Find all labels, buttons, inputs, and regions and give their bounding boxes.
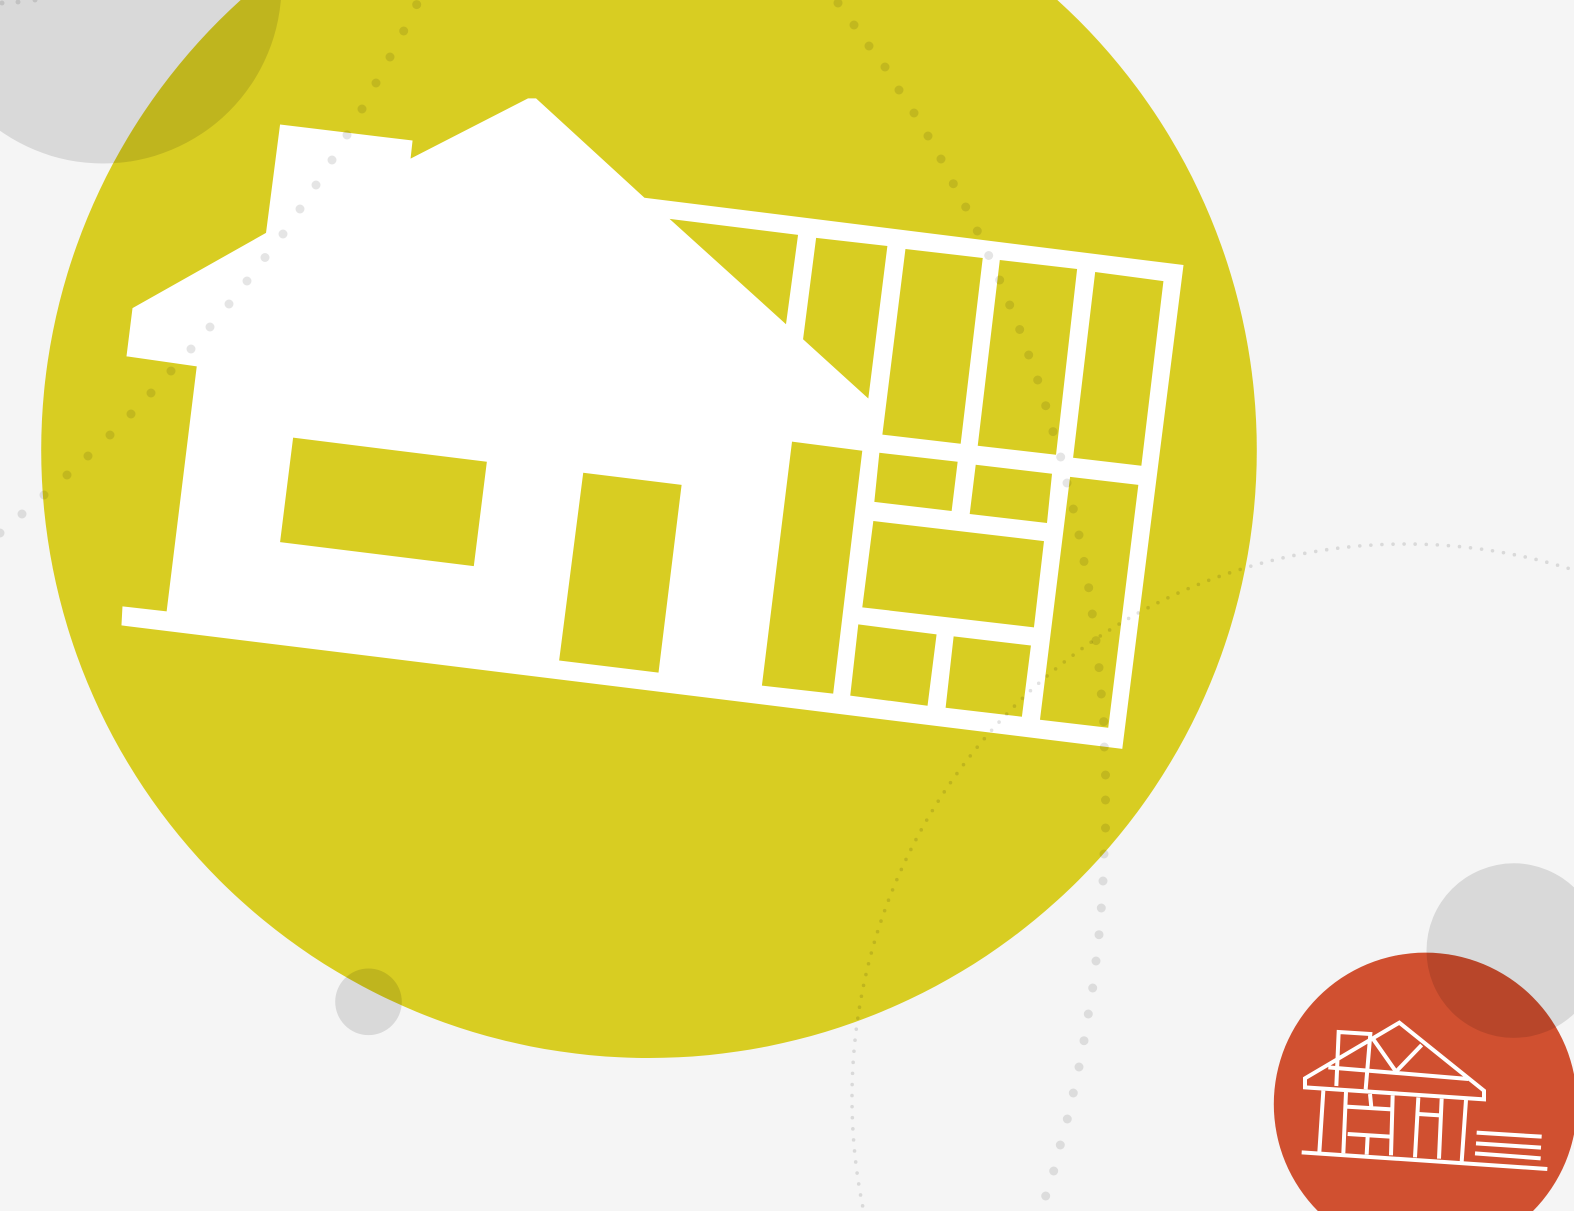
dotted arc: upper left [0, 0, 421, 538]
icon: white house with exposed framing [121, 98, 1184, 749]
dotted arc: large thin circle [852, 544, 1574, 1211]
icon: small outlined house frame [1302, 1023, 1547, 1169]
grey circle: top left [0, 0, 282, 164]
large yellow circle [41, 0, 1257, 1058]
grey circle: small lower left [335, 968, 402, 1035]
dotted arc: centre right [834, 0, 1110, 1200]
grey circle: right overlapping red [1426, 863, 1574, 1038]
red circle [1274, 953, 1574, 1211]
